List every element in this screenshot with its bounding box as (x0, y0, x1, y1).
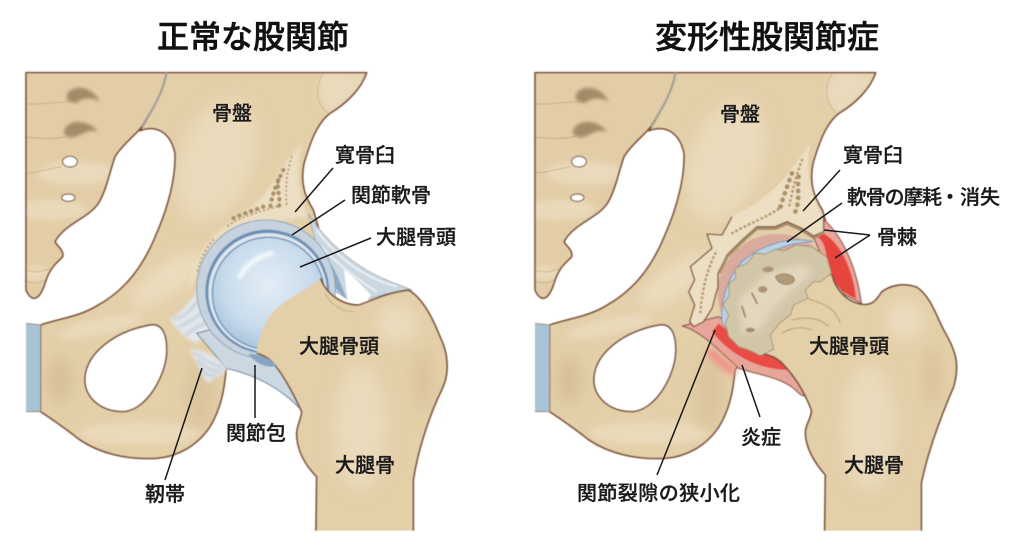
articular cartilage dark ring (205, 230, 329, 354)
label: pelvis: 骨盤 (212, 102, 252, 125)
leader: inflammation (742, 365, 760, 417)
worn cartilage (722, 240, 814, 335)
leader: cartilage wear (787, 203, 842, 242)
acetabulum cancellous bone (188, 143, 308, 293)
leader: joint capsule (254, 365, 256, 418)
title: normal hip joint: 正常な股関節 (157, 19, 349, 55)
joint space ring (208, 233, 327, 352)
joint space tissue (718, 234, 836, 353)
leader: acetabulum (803, 170, 840, 211)
upper capsule ligament (308, 213, 412, 304)
label: inflammation: 炎症 (741, 426, 781, 449)
labrum outer ring (197, 220, 335, 359)
femoral head (212, 237, 324, 349)
label: cartilage wear and loss: 消失 (960, 186, 1000, 209)
left ligament fan (170, 290, 213, 343)
label: cartilage wear and loss: ・ (940, 187, 960, 209)
pelvis and sacrum bones (13, 73, 367, 459)
label: joint space narrowing: 関節裂隙の狭小化 (577, 482, 740, 505)
femur (760, 275, 957, 531)
panel: osteoarthritic hip illustration (522, 73, 957, 531)
panel: normal hip illustration (13, 73, 447, 531)
label: femoral head: 大腿骨頭 (809, 335, 889, 358)
labels: normal hip (145, 102, 456, 506)
leader: acetabulum (295, 168, 333, 212)
label: acetabulum: 寛骨臼 (335, 144, 395, 167)
acetabulum osteophyte and cancellous bone (689, 143, 824, 327)
label: osteophyte: 骨棘 (877, 226, 917, 249)
label: acetabulum: 寛骨臼 (843, 144, 903, 167)
label: pelvis: 骨盤 (720, 103, 760, 126)
lower ligament fan (189, 348, 228, 383)
inflammation red areas (712, 232, 856, 370)
title: hip osteoarthritis: 変形性股関節症 (655, 19, 879, 55)
capsule detail below head (248, 354, 277, 367)
label: articular cartilage: 関節軟骨 (351, 184, 431, 207)
leader: ligament (165, 368, 202, 480)
label: ligament: 靭帯 (145, 483, 185, 506)
label: femoral head lower: 大腿骨頭 (299, 335, 379, 358)
label: cartilage wear and loss: 軟骨の摩耗 (847, 186, 942, 209)
leader: femoral head (300, 238, 371, 267)
leader: osteophyte (824, 230, 870, 258)
label: femur: 大腿骨 (335, 454, 395, 477)
leader: articular cartilage (292, 200, 345, 235)
lower capsule band (197, 323, 304, 413)
femur (257, 278, 447, 531)
inflamed capsule (682, 217, 861, 396)
label: joint capsule: 関節包 (226, 422, 286, 445)
labels: osteoarthritic hip (577, 103, 1000, 505)
eroded femoral head (723, 245, 831, 356)
label: femoral head upper: 大腿骨頭 (376, 226, 456, 249)
pelvis and sacrum bones (522, 73, 876, 459)
label: femur: 大腿骨 (844, 454, 904, 477)
leader: joint space narrowing (657, 330, 715, 475)
